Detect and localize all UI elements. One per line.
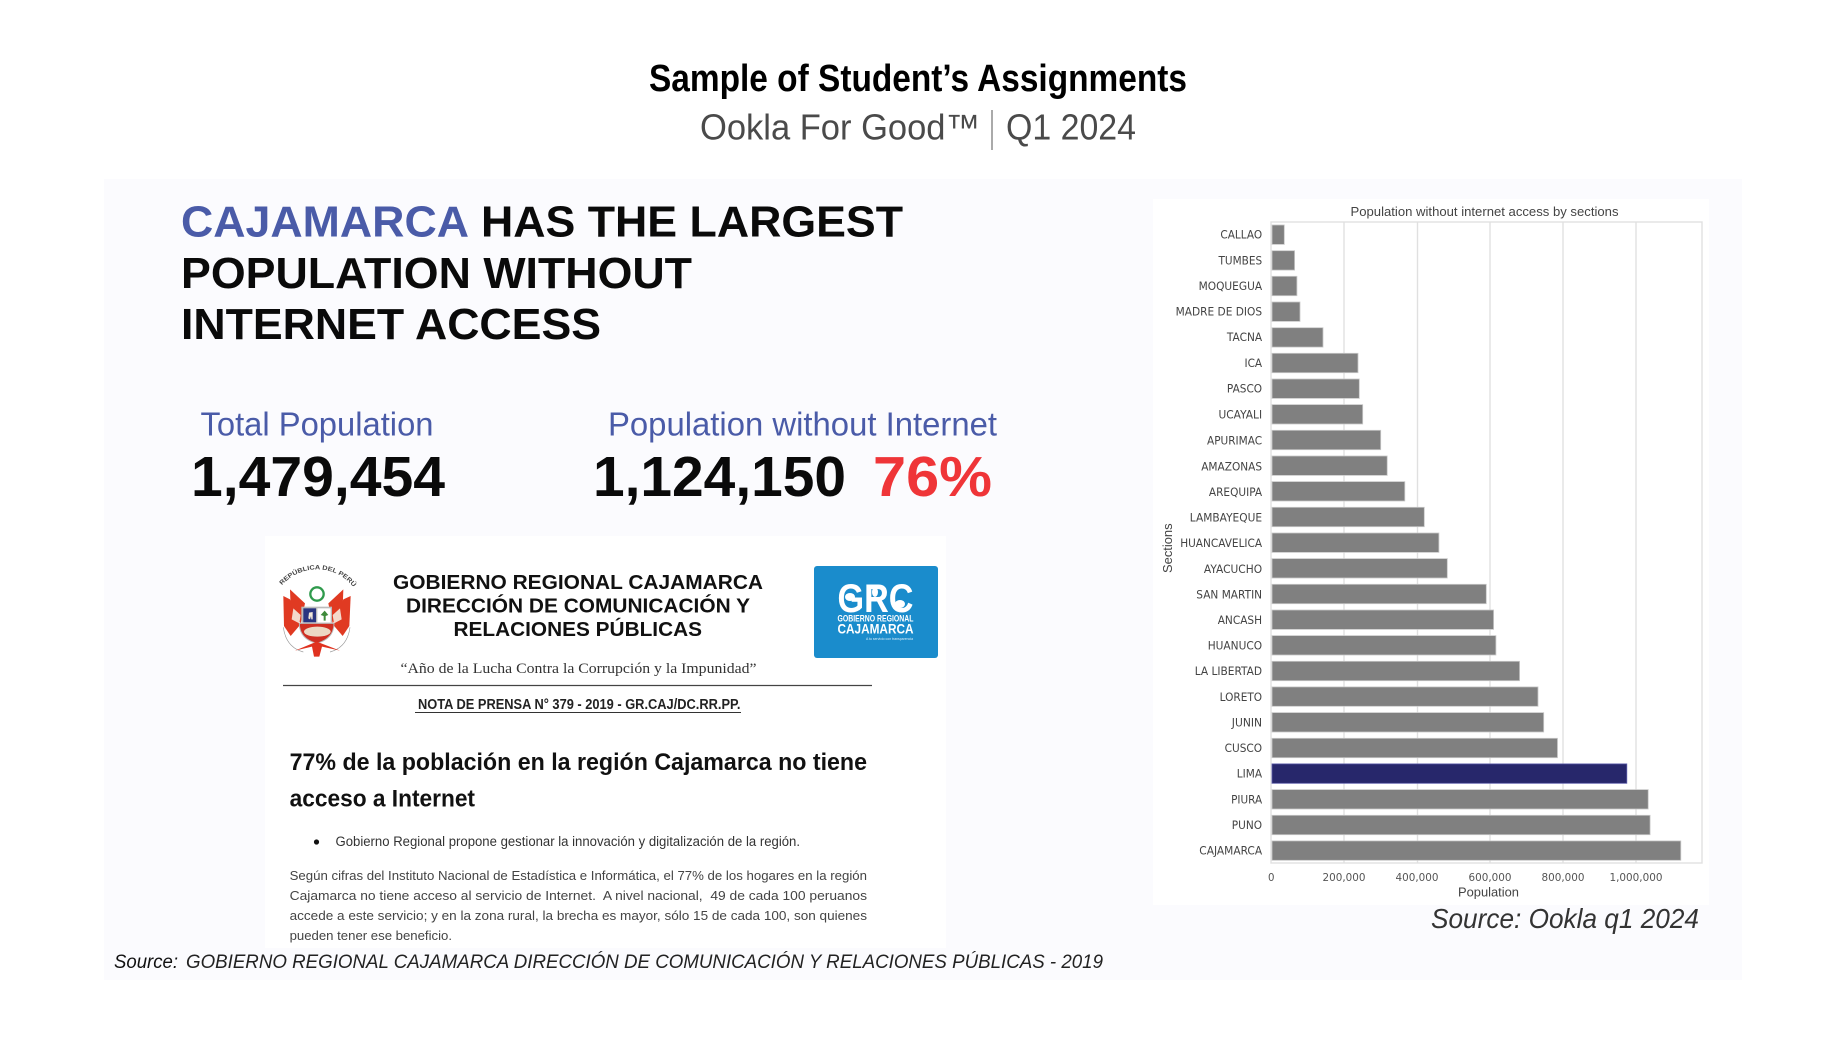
heading: regional government: RELACIONES PÚBLICAS [454, 617, 702, 641]
stat: total population [191, 406, 445, 509]
x axis ticks: 1,000,000 [1610, 871, 1662, 884]
heading: regional government [393, 572, 763, 641]
section labels: HUANCAVELICA [1180, 536, 1262, 550]
x axis ticks: 600,000 [1468, 871, 1512, 884]
section labels: AREQUIPA [1209, 485, 1262, 499]
document body text: pueden tener ese beneficio. [290, 928, 452, 943]
section labels: AMAZONAS [1201, 459, 1262, 473]
stat: total population: 1,479,454 [191, 445, 445, 509]
heading: Cajamarca has the largest population without internet access [181, 198, 903, 349]
icon: GRC logo [814, 566, 938, 658]
subtitle [700, 106, 1136, 150]
section labels: UCAYALI [1218, 407, 1262, 421]
section labels: APURIMAC [1207, 433, 1262, 447]
section labels: CUSCO [1225, 741, 1262, 755]
document headline [290, 749, 867, 812]
heading: Cajamarca has the largest population without internet access: HAS THE LARGEST [481, 198, 903, 246]
x axis ticks: 200,000 [1322, 871, 1366, 884]
icon: coat of arms of Peru [279, 565, 357, 657]
x axis ticks: 800,000 [1542, 871, 1584, 884]
heading: regional government: GOBIERNO REGIONAL CAJAMARCA [393, 572, 763, 594]
x axis ticks: 0 [1268, 871, 1274, 884]
icon: GRC logo: CAJAMARCA [838, 622, 914, 636]
heading: Cajamarca has the largest population without internet access: INTERNET ACCESS [181, 300, 601, 349]
document body text: Según cifras del Instituto Nacional de Estadística e Informática, el 77% de los hogares en la región [290, 868, 867, 883]
title: Sample of Student’s Assignments [649, 58, 1187, 100]
panel: press release document [279, 565, 938, 943]
section labels: LAMBAYEQUE [1190, 511, 1262, 525]
stat: population without internet: Population without Internet [608, 406, 997, 442]
panel: bar chart [1153, 199, 1709, 905]
subtitle: Ookla For Good™ [700, 106, 980, 148]
section labels: JUNIN [1231, 716, 1262, 730]
section labels: LORETO [1220, 690, 1262, 704]
panel: assignment background [104, 179, 1742, 980]
heading: regional government: DIRECCIÓN DE COMUNICACIÓN Y [406, 594, 751, 618]
section labels: SAN MARTIN [1196, 588, 1262, 602]
icon: coat of arms of Peru: REPÚBLICA DEL PERÚ [279, 565, 357, 586]
chart title: Population without internet access by sections [1350, 205, 1618, 219]
icon: GRC logo: GOBIERNO REGIONAL [838, 614, 914, 624]
section labels: ANCASH [1218, 613, 1262, 627]
section labels: LA LIBERTAD [1195, 664, 1262, 678]
document body text: accede a este servicio; y en la zona rural, la brecha es mayor, sólo 15 de cada 100, son quienes [290, 908, 868, 923]
section labels: MADRE DE DIOS [1176, 305, 1262, 319]
icon: GRC logo: GRC [838, 577, 914, 621]
bars [1272, 225, 1681, 860]
section labels: TACNA [1226, 330, 1262, 344]
y axis label: Sections [1160, 523, 1175, 573]
section labels: PIURA [1231, 792, 1262, 806]
heading: Cajamarca has the largest population without internet access: POPULATION WITHOUT [181, 249, 692, 298]
source: Ookla: Source: Ookla q1 2024 [1431, 903, 1699, 934]
icon: GRC logo: A tu servicio con transparencia [866, 636, 914, 641]
document headline: acceso a Internet [290, 786, 475, 812]
section labels: CAJAMARCA [1199, 844, 1262, 858]
x axis ticks: 400,000 [1396, 871, 1438, 884]
source: regional government: Source: [114, 952, 178, 973]
section labels: LIMA [1237, 767, 1262, 781]
section labels [1176, 228, 1262, 858]
subtitle: Q1 2024 [1006, 106, 1136, 148]
section labels: AYACUCHO [1204, 562, 1262, 576]
section labels: PASCO [1227, 382, 1262, 396]
motto: “Año de la Lucha Contra la Corrupción y la Impunidad” [400, 661, 756, 677]
stat: population without internet: 1,124,150 [593, 445, 846, 509]
x axis ticks [1268, 871, 1662, 884]
source: regional government: GOBIERNO REGIONAL CAJAMARCA DIRECCIÓN DE COMUNICACIÓN Y RELACIONES PÚBLICAS - 2019 [186, 951, 1103, 973]
document body text [290, 868, 868, 943]
stat: population without internet: 76% [873, 445, 992, 509]
bullet point: Gobierno Regional propone gestionar la innovación y digitalización de la región. [336, 834, 800, 849]
document body text: Cajamarca no tiene acceso al servicio de Internet. A nivel nacional, 49 de cada 100 peruanos [290, 888, 868, 903]
section labels: TUMBES [1218, 253, 1262, 267]
section labels: HUANUCO [1208, 639, 1262, 653]
x axis label: Population [1458, 884, 1519, 900]
section labels: MOQUEGUA [1199, 279, 1262, 293]
press note number: NOTA DE PRENSA N° 379 - 2019 - GR.CAJ/DC.RR.PP. [418, 697, 740, 713]
stat: total population: Total Population [200, 406, 434, 442]
section labels: ICA [1244, 356, 1262, 370]
heading: Cajamarca has the largest population without internet access: CAJAMARCA [181, 198, 469, 246]
document headline: 77% de la población en la región Cajamarca no tiene [290, 749, 867, 776]
stat: population without internet [593, 406, 997, 509]
section labels: PUNO [1232, 818, 1262, 832]
section labels: CALLAO [1220, 228, 1262, 242]
